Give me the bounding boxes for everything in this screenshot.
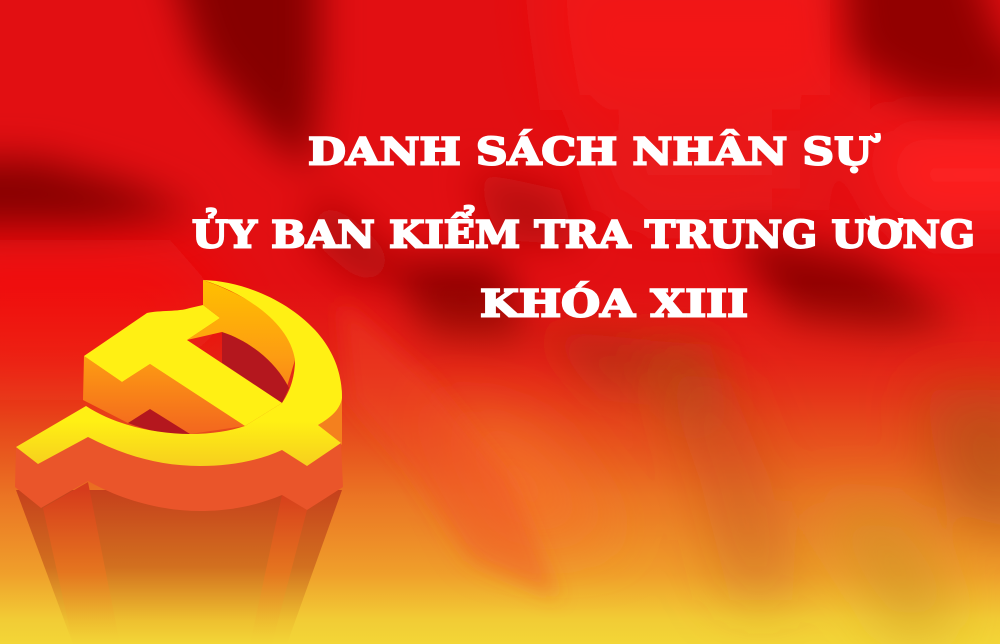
title line 2: ỦY BAN KIỂM TRA TRUNG ƯƠNG (192, 206, 975, 256)
title (192, 130, 975, 326)
title line 1: DANH SÁCH NHÂN SỰ (308, 130, 880, 174)
fold edge (340, 300, 560, 600)
sickle top face (16, 280, 342, 466)
title line 3: KHÓA XIII (480, 282, 748, 326)
inner gap: lower (128, 409, 190, 434)
sickle lower extrusion (15, 437, 343, 511)
hammer side wall (83, 356, 245, 434)
emblem light beams (16, 482, 342, 644)
dark folds (165, 0, 320, 170)
inner gap: upper (222, 332, 289, 403)
emblem: hammer and sickle (15, 280, 343, 644)
sickle right wall (318, 390, 342, 445)
hammer top face (84, 305, 282, 426)
lower folds (430, 400, 620, 540)
sickle inner wall (187, 280, 295, 403)
